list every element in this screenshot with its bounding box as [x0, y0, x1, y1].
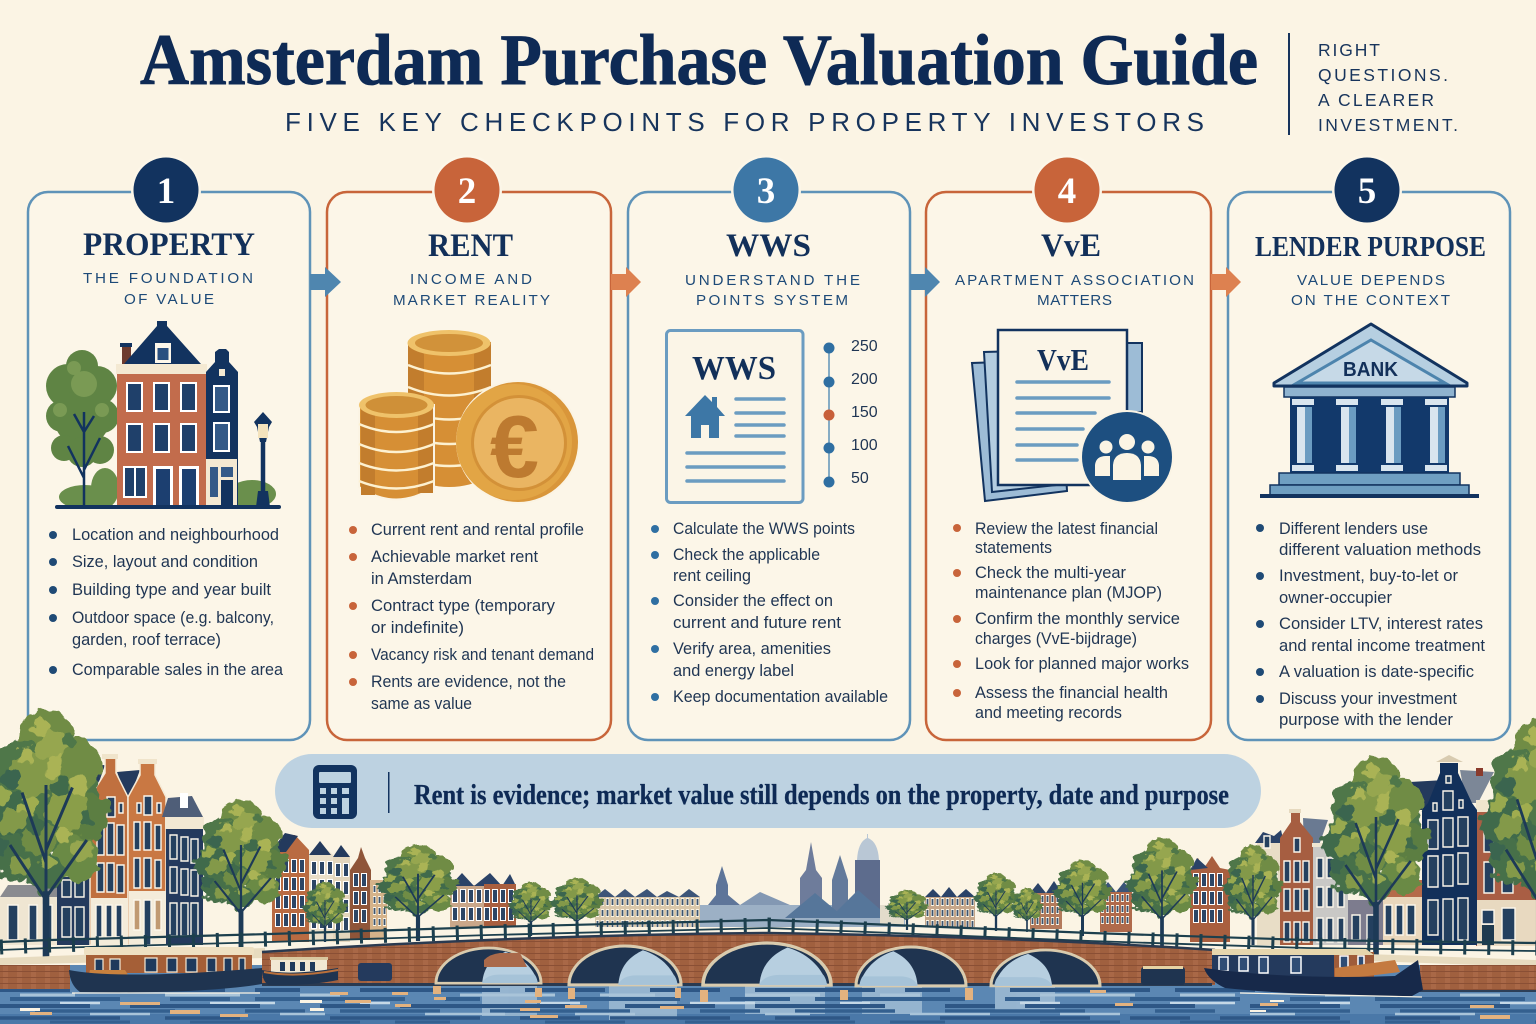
arrow: wws to vve [910, 267, 940, 297]
far houses [450, 873, 1132, 932]
bullet list: lender purpose: and rental income treatment [1279, 637, 1485, 655]
number badge 2: 2 [458, 171, 476, 212]
heading: rent: RENT [428, 228, 513, 264]
icon: canal house with tree and lamp [46, 321, 281, 509]
bullet list: wws: current and future rent [673, 614, 841, 632]
right houseboat [1204, 949, 1423, 997]
tagline: RIGHT [1318, 40, 1380, 60]
subheading: wws [685, 272, 860, 309]
trees [0, 710, 1536, 960]
bullet list: vve: Confirm the monthly service [975, 610, 1180, 628]
bullet list: property: Size, layout and condition [72, 553, 258, 571]
bullet list: rent: same as value [371, 695, 472, 713]
bullet list: wws: rent ceiling [673, 567, 751, 585]
icon: bank building [1260, 324, 1479, 498]
bullet list: property: garden, roof terrace) [72, 631, 221, 649]
number badge 4 [1032, 155, 1102, 225]
subheading: property [83, 270, 253, 308]
bullet list: wws [651, 520, 888, 706]
bullet list: lender purpose [1256, 520, 1485, 729]
bullet list: vve: Look for planned major works [975, 655, 1189, 673]
bullet list: property: Outdoor space (e.g. balcony, [72, 609, 274, 627]
number badge 5 [1332, 155, 1402, 225]
chart: points scale: 200 [851, 371, 878, 388]
bullet list: vve: Assess the financial health [975, 684, 1168, 702]
subheading: wws: POINTS SYSTEM [696, 292, 848, 309]
callout text: Rent is evidence; market value still depends on the property, date and purpose [414, 780, 1229, 811]
bullet list: vve: and meeting records [975, 704, 1122, 722]
subheading: wws: UNDERSTAND THE [685, 272, 860, 289]
icon: wws document [666, 330, 803, 502]
subheading: lender purpose: ON THE CONTEXT [1291, 292, 1450, 309]
tagline [1318, 40, 1458, 135]
bullet list: vve: statements [975, 539, 1052, 557]
icon: wws document: WWS [692, 350, 776, 387]
number badge 4: 4 [1058, 171, 1076, 212]
chart: points scale: 150 [851, 404, 878, 421]
bullet list: lender purpose: A valuation is date-specific [1279, 663, 1474, 681]
bullet list: lender purpose: Discuss your investment [1279, 690, 1457, 708]
subheading: rent [393, 271, 550, 309]
bullet list: property [49, 526, 284, 679]
arrow: rent to wws [611, 267, 641, 297]
panel: 3 wws [628, 155, 910, 740]
subheading: lender purpose [1291, 272, 1450, 309]
small boat [262, 957, 338, 985]
bullet list: rent: in Amsterdam [371, 570, 472, 588]
number badge 1: 1 [157, 171, 175, 212]
bullet list: lender purpose: Different lenders use [1279, 520, 1428, 538]
arrow: property to rent [310, 267, 341, 297]
bullet list: lender purpose: Consider LTV, interest rates [1279, 615, 1483, 633]
arched brick bridge [262, 933, 1215, 986]
heading: property: PROPERTY [83, 227, 255, 263]
bullet list: wws: and energy label [673, 662, 794, 680]
canal railing [0, 920, 1536, 951]
callout banner [275, 754, 1261, 828]
left houseboat [69, 947, 262, 993]
bullet list: vve: Check the multi-year [975, 564, 1127, 582]
subheading: rent: INCOME AND [410, 271, 532, 288]
subheading: lender purpose: VALUE DEPENDS [1297, 272, 1445, 289]
left quay [0, 948, 265, 989]
distant church [700, 834, 905, 927]
bullet list: property: Building type and year built [72, 581, 271, 599]
bullet list: property: Comparable sales in the area [72, 661, 284, 679]
tagline: INVESTMENT. [1318, 115, 1458, 135]
subheading: rent: MARKET REALITY [393, 292, 550, 309]
heading: vve: VvE [1041, 228, 1101, 264]
icon: bank building: BANK [1343, 359, 1399, 381]
bullet list: rent: Current rent and rental profile [371, 521, 584, 539]
panel: 1 property [28, 155, 310, 740]
bullet list: rent: or indefinite) [371, 619, 464, 637]
number badge 3: 3 [757, 171, 775, 212]
bullet list: rent: Rents are evidence, not the [371, 673, 566, 691]
bullet list: vve: Review the latest financial [975, 520, 1158, 538]
icon: vve documents with people [972, 330, 1174, 504]
bullet list: lender purpose: Investment, buy-to-let or [1279, 567, 1459, 585]
subheading: vve: MATTERS [1037, 292, 1112, 309]
bullet list: wws: Calculate the WWS points [673, 520, 855, 538]
number badge 3 [731, 155, 801, 225]
arrow: vve to lender [1211, 267, 1241, 297]
subtitle: FIVE KEY CHECKPOINTS FOR PROPERTY INVESTORS [285, 107, 1204, 137]
illustration: amsterdam canal skyline [0, 710, 1536, 1024]
bullet list: lender purpose: different valuation methods [1279, 541, 1481, 559]
tagline: A CLEARER [1318, 90, 1434, 110]
panel: 4 vve [926, 155, 1211, 740]
subheading: property: THE FOUNDATION [83, 270, 253, 287]
icon: euro coin stacks [359, 330, 580, 504]
bullet list: rent: Vacancy risk and tenant demand [371, 646, 594, 664]
panel: 2 rent [327, 155, 611, 740]
left canal houses [0, 754, 387, 945]
tagline: QUESTIONS. [1318, 65, 1448, 85]
bullet list: lender purpose: purpose with the lender [1279, 711, 1454, 729]
heading: wws: WWS [726, 228, 811, 264]
panel: 5 lender purpose [1228, 155, 1510, 740]
number badge 5: 5 [1358, 171, 1376, 212]
bullet list: property: Location and neighbourhood [72, 526, 279, 544]
subheading: property: OF VALUE [124, 291, 214, 308]
subheading: vve: APARTMENT ASSOCIATION [955, 272, 1194, 289]
bullet list: rent [349, 521, 594, 713]
title: Amsterdam Purchase Valuation Guide [140, 20, 1258, 100]
icon: calculator [313, 765, 357, 819]
bullet list: wws: Consider the effect on [673, 592, 833, 610]
icon: vve documents with people: VvE [1037, 342, 1089, 377]
heading: lender purpose: LENDER PURPOSE [1255, 231, 1486, 263]
chart: points scale [824, 338, 878, 488]
bullet list: vve [953, 520, 1189, 722]
bullet list: vve: charges (VvE-bijdrage) [975, 630, 1137, 648]
right canal houses [1190, 755, 1536, 946]
chart: points scale: 50 [851, 470, 869, 487]
right quay [1340, 953, 1536, 992]
chart: points scale: 250 [851, 338, 878, 355]
water [0, 965, 1536, 1024]
bullet list: rent: Achievable market rent [371, 548, 538, 566]
chart: points scale: 100 [851, 437, 878, 454]
subheading: vve [955, 272, 1194, 309]
bullet list: wws: Check the applicable [673, 546, 820, 564]
bullet list: wws: Keep documentation available [673, 688, 888, 706]
number badge 1 [131, 155, 201, 225]
number badge 2 [432, 155, 502, 225]
bullet list: vve: maintenance plan (MJOP) [975, 584, 1162, 602]
icon: euro coin stacks: € [490, 397, 539, 496]
bullet list: rent: Contract type (temporary [371, 597, 556, 615]
bullet list: lender purpose: owner-occupier [1279, 589, 1393, 607]
bullet list: wws: Verify area, amenities [673, 640, 831, 658]
